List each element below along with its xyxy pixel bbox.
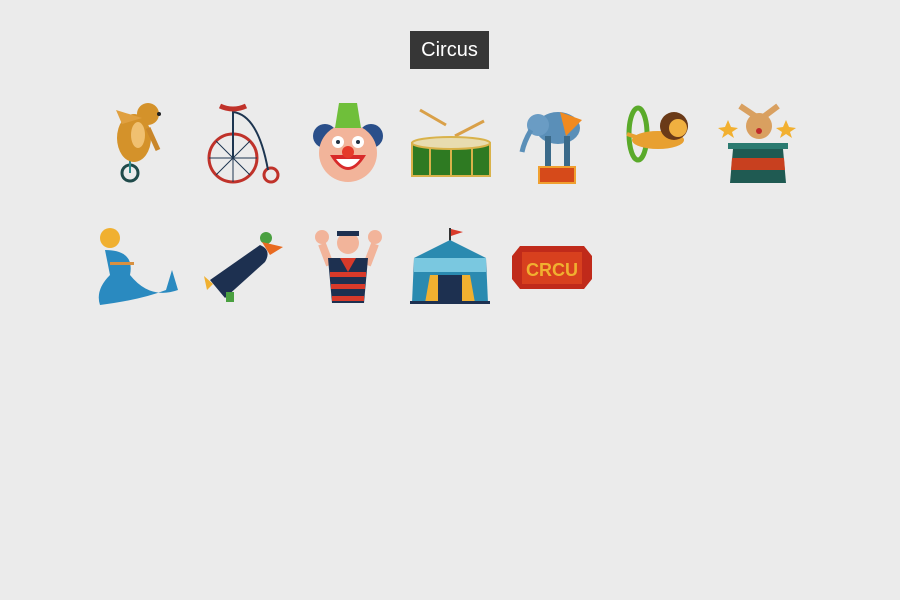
- icon: bear on unicycle: [116, 103, 161, 181]
- icon: lion through hoop: [627, 108, 688, 160]
- icon: seal with ball: [99, 228, 178, 305]
- icon: circus sign: CRCU: [526, 260, 578, 280]
- icon: circus tent: [410, 228, 490, 304]
- icon: elephant on pedestal: [522, 112, 582, 183]
- icon: rabbit in hat: [718, 106, 796, 183]
- title: [410, 31, 489, 69]
- icon: clown: [313, 103, 383, 182]
- icon: human cannonball: [204, 232, 283, 302]
- icon: strongman: [315, 230, 382, 303]
- icon: circus sign: [512, 246, 592, 289]
- icon: drum: [412, 110, 490, 176]
- icon: penny-farthing bicycle: [209, 106, 278, 182]
- title: Circus: [421, 39, 478, 61]
